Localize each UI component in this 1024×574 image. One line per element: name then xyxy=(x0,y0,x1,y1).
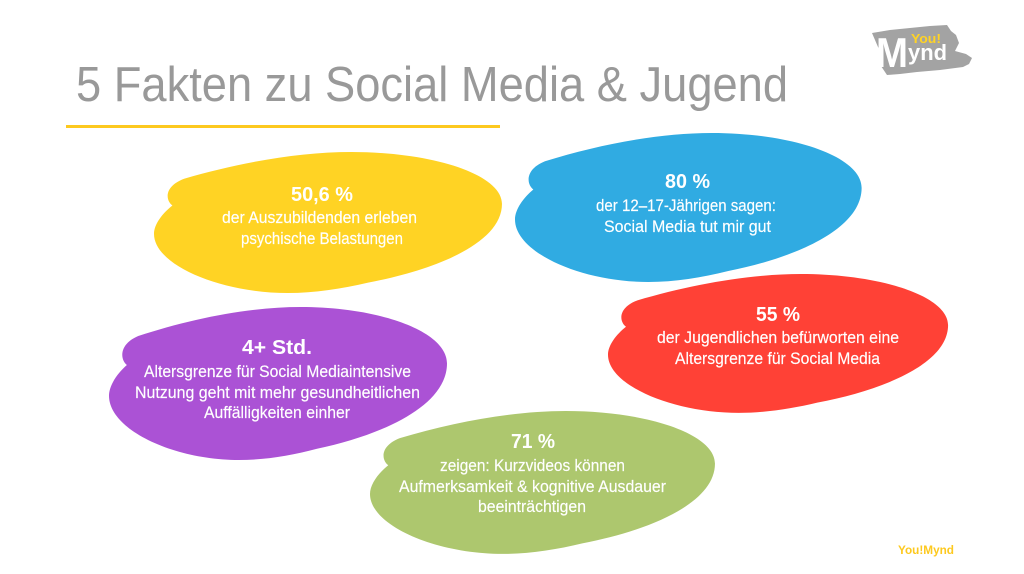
logo word ynd: ynd xyxy=(908,40,947,65)
footer brand: You!Mynd xyxy=(898,545,954,557)
purple blob xyxy=(109,307,447,460)
green blob xyxy=(370,411,715,554)
red text line 2: Altersgrenze für Social Media xyxy=(675,350,881,368)
red text line 1: der Jugendlichen befürworten eine xyxy=(657,329,899,347)
panel: purple fact 4+ Std. xyxy=(109,307,447,460)
panel: red fact 55 % xyxy=(608,274,948,413)
green text line 1: zeigen: Kurzvideos können xyxy=(440,457,625,475)
yellow heading: 50,6 % xyxy=(291,184,353,206)
green text line 3: beeinträchtigen xyxy=(478,498,586,516)
panel: blue fact 80 % xyxy=(515,133,862,282)
green heading: 71 % xyxy=(511,431,555,453)
red blob xyxy=(608,274,948,413)
blue blob xyxy=(515,133,862,282)
red heading: 55 % xyxy=(756,304,800,326)
purple text line 2: Nutzung geht mit mehr gesundheitlichen xyxy=(135,384,420,402)
blue heading: 80 % xyxy=(665,171,710,193)
purple heading: 4+ Std. xyxy=(242,337,312,359)
title: 5 Fakten zu Social Media & Jugend xyxy=(76,58,788,112)
panel: green fact 71 % xyxy=(370,411,715,554)
logo brush background xyxy=(872,25,972,75)
yellow text line 1: der Auszubildenden erleben xyxy=(222,209,417,227)
yellow blob xyxy=(154,152,502,293)
logo word You!: You! xyxy=(911,31,941,46)
purple text line 3: Auffälligkeiten einher xyxy=(204,404,350,422)
panel: yellow fact 50,6 % xyxy=(154,152,502,293)
yellow text line 2: psychische Belastungen xyxy=(241,230,403,248)
blue text line 1: der 12–17-Jährigen sagen: xyxy=(596,197,776,215)
blue text line 2: Social Media tut mir gut xyxy=(604,218,771,236)
purple text line 1: Altersgrenze für Social Mediaintensive xyxy=(144,363,411,381)
logo letter M: M xyxy=(876,29,908,76)
green text line 2: Aufmerksamkeit & kognitive Ausdauer xyxy=(399,478,666,496)
logo: You!Mynd xyxy=(872,25,972,76)
title underline xyxy=(66,125,500,128)
